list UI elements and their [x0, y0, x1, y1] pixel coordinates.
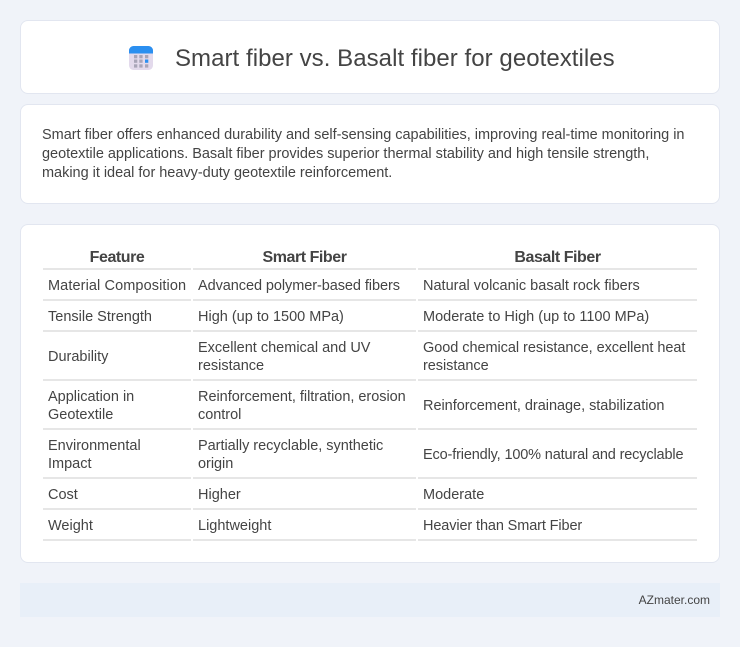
text: Advanced polymer-based fibers [198, 278, 400, 294]
text: Partially recyclable, synthetic [198, 438, 383, 454]
text: Eco-friendly, 100% natural and recyclable [423, 447, 683, 463]
row: tensile strength [43, 309, 697, 332]
text: Moderate [423, 487, 484, 503]
text: Natural volcanic basalt rock fibers [423, 278, 640, 294]
text: Basalt Fiber [514, 249, 601, 266]
text: High (up to 1500 MPa) [198, 309, 344, 325]
text: Reinforcement, drainage, stabilization [423, 398, 664, 414]
row: cost [43, 487, 697, 510]
text: Tensile Strength [48, 309, 152, 325]
text: resistance [198, 358, 264, 374]
footer bar [20, 583, 720, 617]
footer credit: AZmater.com [639, 593, 710, 607]
text: Feature [90, 249, 144, 266]
intro text card [20, 104, 720, 204]
intro text [42, 127, 684, 181]
text: Heavier than Smart Fiber [423, 518, 582, 534]
intro text: making it ideal for heavy-duty geotextile reinforcement. [42, 165, 392, 181]
text: origin [198, 456, 233, 472]
title: Smart fiber vs. Basalt fiber for geotextiles [175, 45, 615, 72]
text: Material Composition [48, 278, 186, 294]
text: Lightweight [198, 518, 271, 534]
table header [43, 249, 697, 270]
row: environmental impact [43, 438, 697, 479]
intro text: geotextile applications. Basalt fiber provides superior thermal stability and high tensile strength, [42, 146, 649, 162]
text: Good chemical resistance, excellent heat [423, 340, 685, 356]
text: Durability [48, 349, 108, 365]
icon: calendar [129, 46, 153, 70]
text: Weight [48, 518, 93, 534]
text: Cost [48, 487, 78, 503]
text: Moderate to High (up to 1100 MPa) [423, 309, 649, 325]
row: durability [43, 340, 697, 381]
text: control [198, 407, 241, 423]
text: Environmental [48, 438, 141, 454]
row: weight [43, 518, 697, 541]
text: Reinforcement, filtration, erosion [198, 389, 406, 405]
title card [20, 20, 720, 94]
text: Impact [48, 456, 92, 472]
text: Smart Fiber [263, 249, 346, 266]
text: resistance [423, 358, 489, 374]
comparison table card [20, 224, 720, 563]
text: Higher [198, 487, 241, 503]
text: Application in [48, 389, 134, 405]
row: application in geotextile [43, 389, 697, 430]
row: material composition [43, 278, 697, 301]
text: Geotextile [48, 407, 113, 423]
text: Excellent chemical and UV [198, 340, 370, 356]
intro text: Smart fiber offers enhanced durability and self-sensing capabilities, improving real-time monitoring in [42, 127, 684, 143]
